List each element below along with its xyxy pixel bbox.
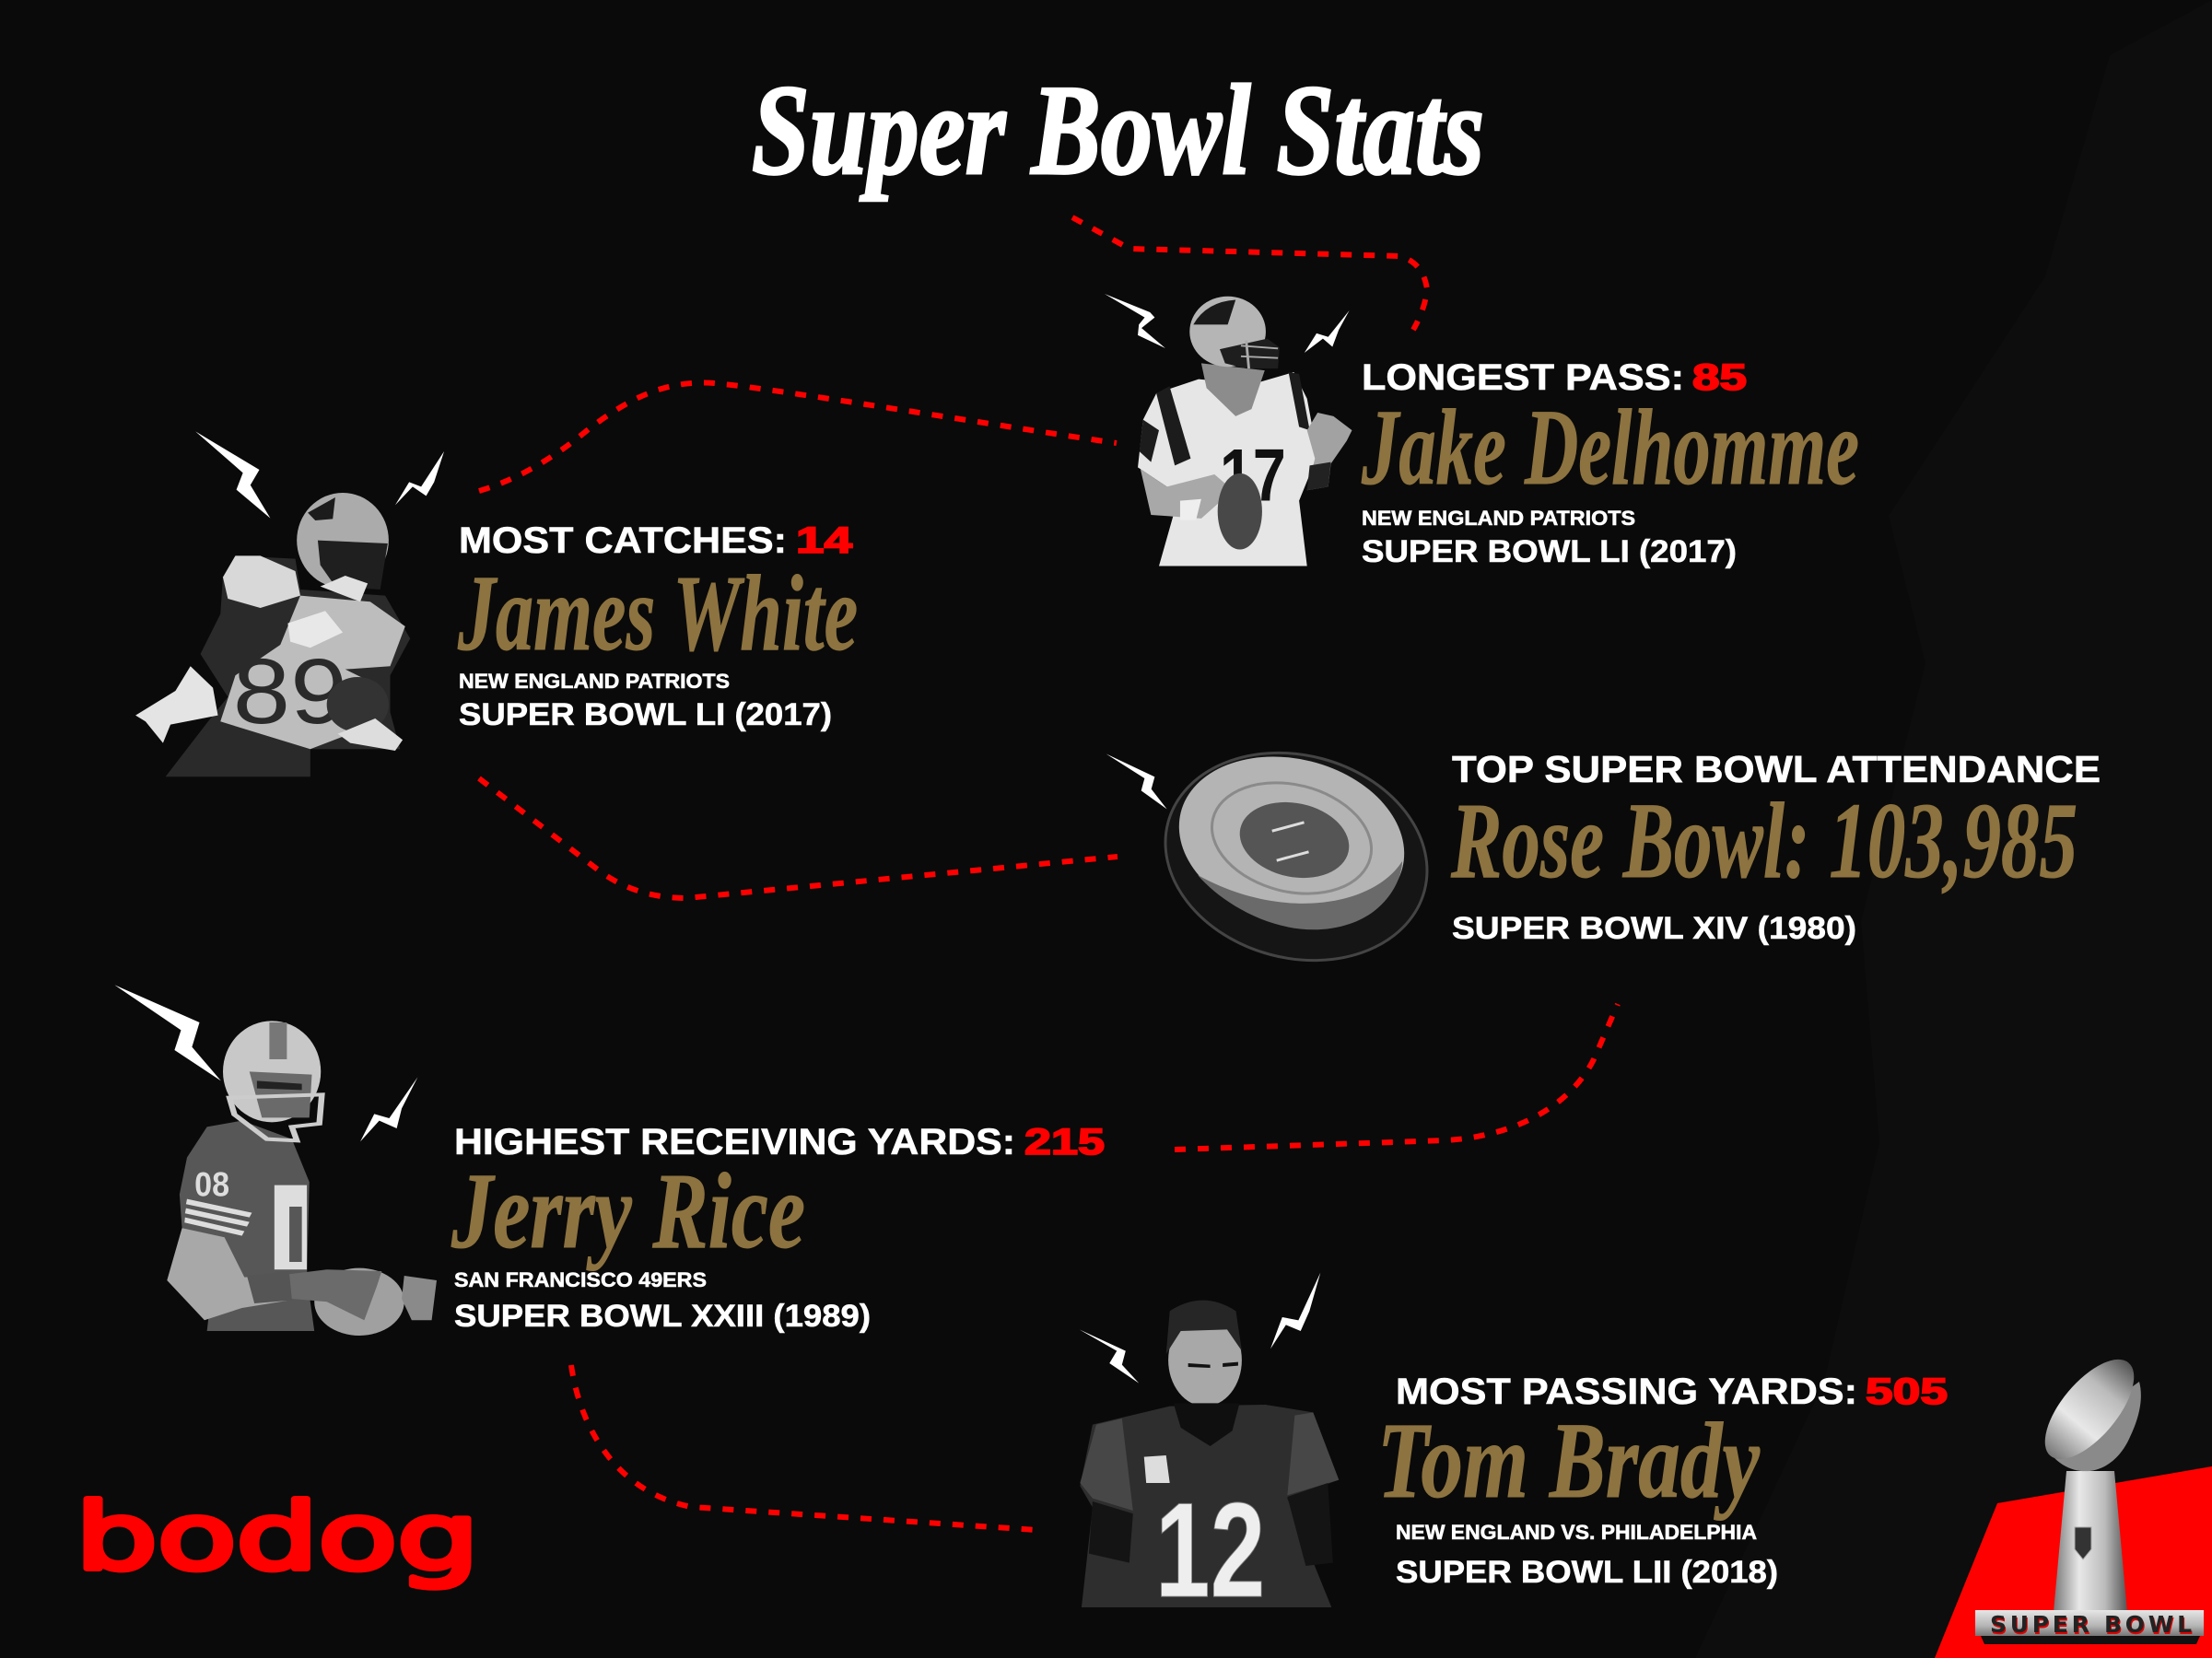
panel: most passing yards, Tom Brady xyxy=(1080,1273,1948,1626)
player name: Jake Delhomme xyxy=(1361,387,1859,508)
panel: most catches, James White xyxy=(135,431,858,776)
game: SUPER BOWL XIV (1980) xyxy=(1452,911,1856,946)
red corner wedge xyxy=(1935,1466,2212,1658)
icon: lightning bolt right xyxy=(360,1077,417,1141)
dotted connector: Rose Bowl to Jerry Rice xyxy=(1175,1004,1618,1150)
stat label: MOST PASSING YARDS: xyxy=(1396,1372,1857,1412)
dotted connector: title to Jake Delhomme xyxy=(1072,217,1427,330)
icon: lightning bolt xyxy=(1106,753,1167,809)
player photo: James White: 89 xyxy=(233,640,347,742)
player photo: Jake Delhomme xyxy=(1138,297,1352,566)
icon: Super Bowl trophy xyxy=(1975,1345,2204,1644)
dotted connector: James White to Jake Delhomme xyxy=(479,383,1117,491)
team: NEW ENGLAND VS. PHILADELPHIA xyxy=(1396,1521,1757,1544)
team: NEW ENGLAND PATRIOTS xyxy=(1362,507,1635,530)
logo: bodog: bodog xyxy=(76,1483,479,1591)
player photo: Jerry Rice: 08 xyxy=(194,1166,229,1203)
panel: longest pass, Jake Delhomme xyxy=(1105,294,1859,569)
game: SUPER BOWL LI (2017) xyxy=(1362,534,1737,569)
stat label: LONGEST PASS: xyxy=(1362,357,1684,398)
panel: highest receiving yards, Jerry Rice xyxy=(114,985,1105,1336)
icon: lightning bolt left xyxy=(1080,1329,1139,1384)
stat label: TOP SUPER BOWL ATTENDANCE xyxy=(1452,748,2101,790)
title: Super Bowl Stats xyxy=(752,59,1484,202)
player name: Jerry Rice xyxy=(451,1150,805,1271)
player photo: James White xyxy=(135,493,410,776)
icon: lightning bolt right xyxy=(1305,310,1350,353)
game: SUPER BOWL LII (2018) xyxy=(1396,1555,1778,1590)
player name: Tom Brady xyxy=(1377,1400,1760,1521)
dotted connector: James White to Rose Bowl xyxy=(479,778,1118,898)
dotted connector: Jerry Rice to Tom Brady xyxy=(571,1365,1036,1530)
stat value: 505 xyxy=(1866,1372,1948,1412)
game: SUPER BOWL LI (2017) xyxy=(459,697,832,732)
icon: lightning bolt left xyxy=(195,431,270,519)
trophy base lettering: SUPER BOWL xyxy=(1990,1611,2192,1638)
team: NEW ENGLAND PATRIOTS xyxy=(459,670,730,693)
game: SUPER BOWL XXIII (1989) xyxy=(454,1299,871,1334)
player photo: Tom Brady: 12 xyxy=(1155,1475,1265,1626)
trophy base lettering shadow: SUPER BOWL xyxy=(1991,1613,2193,1640)
stat value: 85 xyxy=(1692,357,1747,398)
player photo: Jake Delhomme: 17 xyxy=(1220,434,1286,517)
icon: lightning bolt right xyxy=(395,451,444,505)
stat value: 14 xyxy=(796,520,853,561)
icon: lightning bolt left xyxy=(1105,294,1165,348)
icon: lightning bolt left xyxy=(114,985,221,1080)
stat value: 215 xyxy=(1024,1122,1105,1162)
player photo: Jerry Rice xyxy=(167,1021,437,1336)
team: SAN FRANCISCO 49ERS xyxy=(454,1268,707,1291)
player photo: Tom Brady xyxy=(1080,1301,1339,1626)
stat label: HIGHEST RECEIVING YARDS: xyxy=(454,1122,1015,1162)
panel: top attendance, Rose Bowl xyxy=(1106,724,2101,989)
stat label: MOST CATCHES: xyxy=(459,520,787,561)
icon: lightning bolt right xyxy=(1270,1273,1320,1349)
stadium image xyxy=(1141,724,1451,989)
player name: James White xyxy=(457,553,858,673)
